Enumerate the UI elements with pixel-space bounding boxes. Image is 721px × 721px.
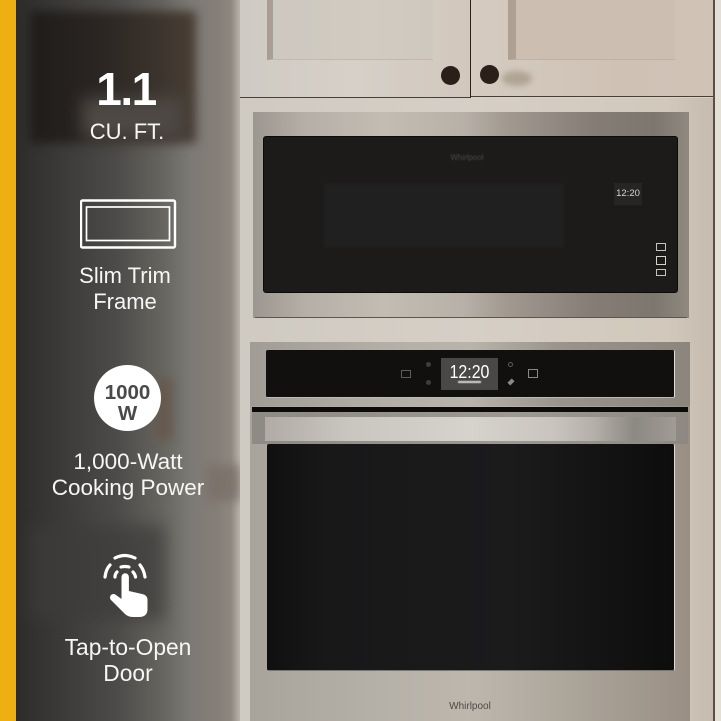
blurred lower shape bbox=[30, 525, 165, 620]
cabinet right edge line bbox=[713, 0, 714, 721]
microwave clock: 12:20 bbox=[616, 188, 640, 199]
oven clock time: 12:20 bbox=[450, 361, 489, 382]
icon: tool lower right bbox=[507, 378, 515, 386]
knob right bbox=[480, 65, 499, 84]
oven handle bbox=[265, 417, 676, 441]
power label: Cooking Power bbox=[52, 475, 204, 500]
left door recessed panel bbox=[267, 0, 433, 60]
icon: 1000 W badge: W bbox=[118, 402, 137, 425]
feature: cooking power bbox=[52, 365, 204, 500]
oven logo: Whirlpool bbox=[449, 701, 491, 712]
tap label: Tap-to-Open bbox=[65, 634, 191, 660]
panel: microwave bbox=[253, 112, 689, 318]
power label bbox=[52, 449, 204, 500]
icon: 1000 W badge bbox=[94, 365, 161, 431]
icon: camera button bbox=[401, 370, 411, 378]
blurred orange shape bbox=[155, 378, 173, 440]
microwave window bbox=[324, 183, 564, 247]
cabinet right door bbox=[471, 0, 713, 97]
oven top control band bbox=[250, 342, 690, 406]
oven clock date line bbox=[458, 381, 481, 383]
microwave clock bbox=[614, 183, 642, 205]
icon: dot upper left bbox=[426, 362, 431, 367]
knob left bbox=[441, 66, 460, 85]
frame label: Frame bbox=[93, 289, 157, 314]
oven door top bbox=[252, 412, 688, 444]
tap label bbox=[65, 634, 191, 686]
cabinet wall right edge bbox=[240, 98, 714, 721]
icon: tap hand bbox=[103, 554, 148, 617]
capacity number: 1.1 bbox=[96, 63, 156, 115]
oven control panel bbox=[266, 350, 675, 398]
cabinet door gap bbox=[470, 0, 471, 98]
power label: 1,000-Watt bbox=[73, 449, 183, 474]
microwave bottom vent bbox=[255, 317, 687, 318]
icon: dot upper right bbox=[508, 362, 513, 367]
feature: tap to open bbox=[65, 554, 191, 686]
oven gap bbox=[252, 407, 688, 412]
icon: frame bbox=[80, 199, 176, 249]
tap label: Door bbox=[103, 660, 153, 686]
accent bar bbox=[0, 0, 16, 721]
feature: capacity bbox=[90, 63, 164, 144]
right door recessed panel bbox=[508, 0, 675, 60]
capacity unit: CU. FT. bbox=[90, 119, 164, 144]
blurred brown shape bbox=[206, 465, 240, 501]
feature: slim trim frame bbox=[79, 199, 176, 314]
microwave black glass door bbox=[263, 136, 678, 293]
icon: 1000 W badge: 1000 bbox=[105, 381, 150, 404]
wall strip bbox=[715, 0, 721, 721]
panel: wall oven bbox=[250, 342, 690, 721]
panel: blurred left background bbox=[16, 0, 240, 721]
oven glass door bbox=[267, 444, 675, 671]
frame label bbox=[79, 263, 171, 314]
blurred dark cabinet shape bbox=[30, 11, 196, 143]
microwave buttons bbox=[656, 243, 666, 276]
frame label: Slim Trim bbox=[79, 263, 171, 288]
icon: screen button bbox=[528, 369, 538, 378]
cabinet left door bbox=[240, 0, 470, 98]
icon: dot lower left bbox=[426, 380, 431, 385]
oven display bbox=[441, 358, 498, 390]
microwave logo: Whirlpool bbox=[450, 153, 484, 162]
blurred grey shape bbox=[82, 98, 182, 138]
knob shadow bbox=[502, 71, 532, 86]
